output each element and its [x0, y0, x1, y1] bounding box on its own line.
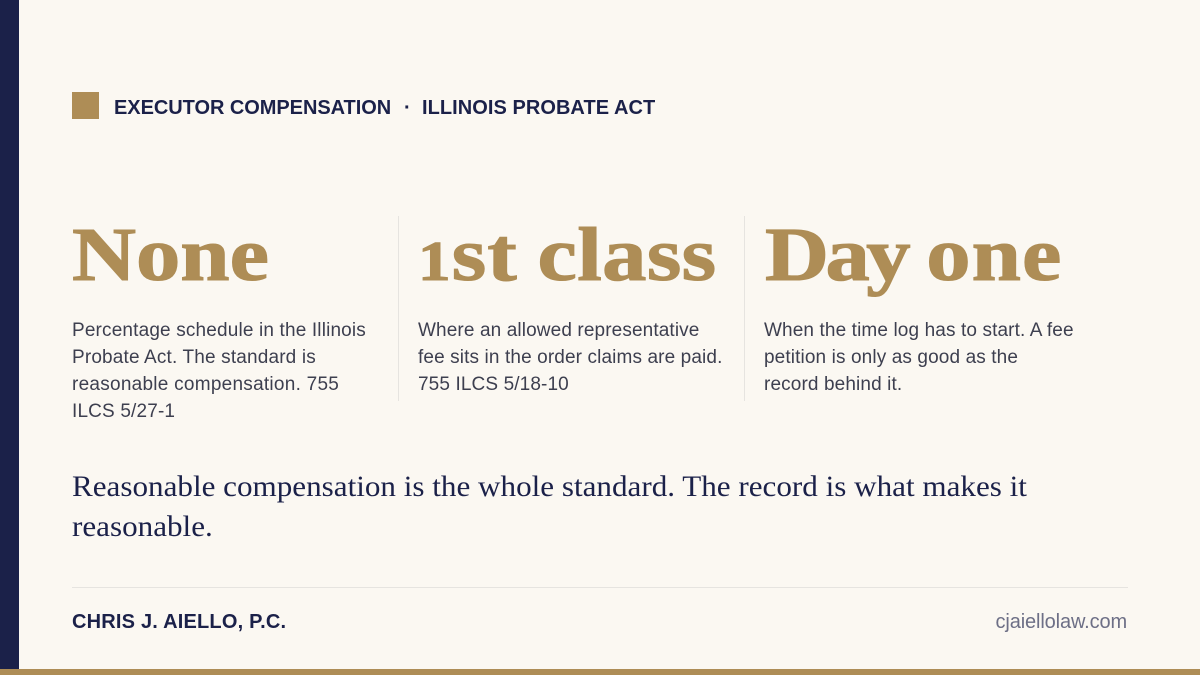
icon: gold square: [72, 92, 99, 119]
stat 3: description: record behind it.: [764, 374, 902, 395]
takeaway statement: reasonable.: [72, 510, 213, 543]
takeaway statement: Reasonable compensation is the whole standard. The record is what makes it: [72, 470, 1027, 503]
left navy bar: [0, 0, 19, 669]
bottom gold bar: [0, 669, 1200, 675]
divider 2: [744, 216, 745, 401]
footer divider: [72, 587, 1128, 588]
stat 3: description: When the time log has to start. A fee: [764, 320, 1074, 341]
stat 3: value: Day one: [765, 213, 1062, 297]
stat 2: description: [418, 320, 722, 395]
stat 1: description: Probate Act. The standard is: [72, 347, 316, 368]
stat 3: description: petition is only as good as the: [764, 347, 1018, 368]
stat 1: description: ILCS 5/27-1: [72, 401, 175, 422]
stat 1: description: Percentage schedule in the Illinois: [72, 320, 366, 341]
header label: ·: [404, 97, 411, 119]
header label: [114, 97, 655, 119]
footer firm name: CHRIS J. AIELLO, P.C.: [72, 611, 286, 633]
takeaway statement: [72, 470, 1027, 543]
stat 1: description: reasonable compensation. 755: [72, 374, 339, 395]
divider 1: [398, 216, 399, 401]
stat 2: value: 1st class: [418, 213, 716, 297]
stat 3: description: [764, 320, 1074, 395]
stat 2: description: Where an allowed representative: [418, 320, 699, 341]
footer website: cjaiellolaw.com: [996, 611, 1127, 633]
stat 2: description: 755 ILCS 5/18-10: [418, 374, 569, 395]
header label: ILLINOIS PROBATE ACT: [422, 97, 655, 119]
stat 1: description: [72, 320, 366, 422]
stat 2: description: fee sits in the order claims are paid.: [418, 347, 722, 368]
header label: EXECUTOR COMPENSATION: [114, 97, 391, 119]
stat 1: value: None: [72, 213, 269, 297]
